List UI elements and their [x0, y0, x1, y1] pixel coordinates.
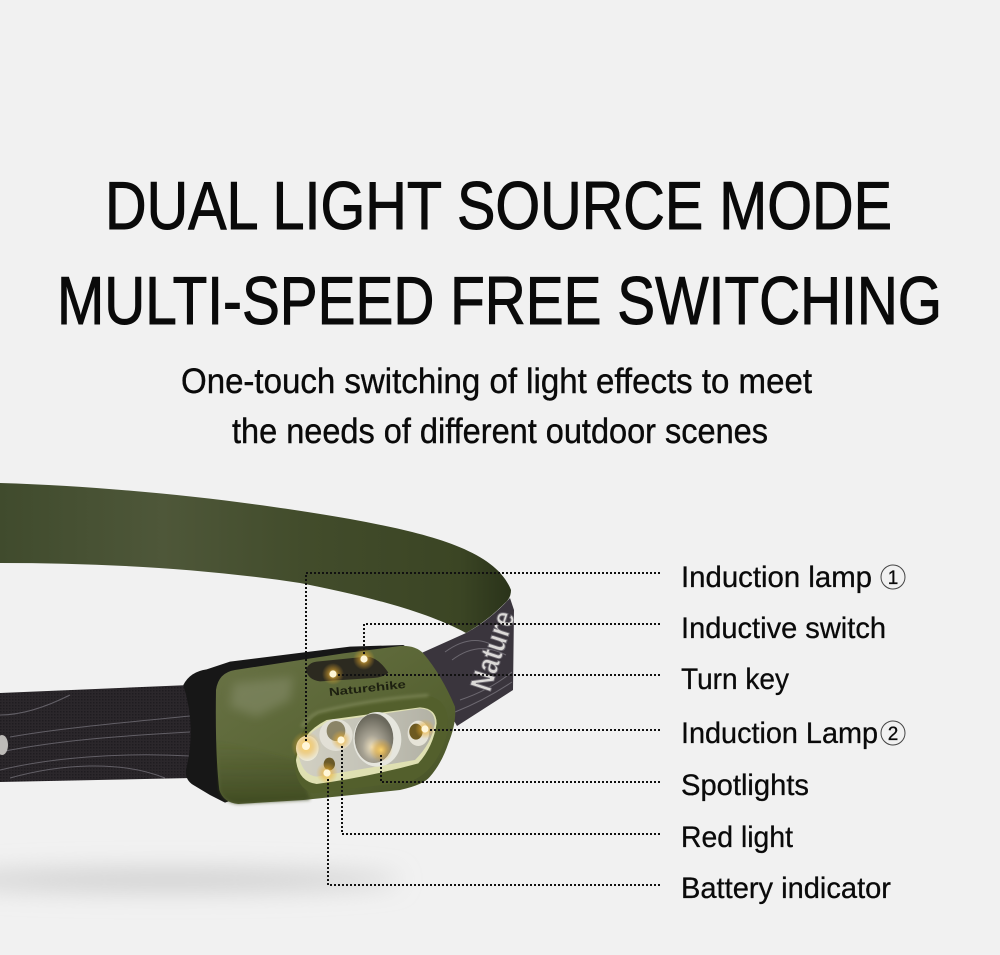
dark strap, left side	[0, 685, 192, 782]
label: induction lamp 1: Induction lamp	[681, 561, 872, 594]
right LED	[408, 721, 429, 746]
green shell	[216, 646, 455, 804]
subtitle	[181, 362, 812, 451]
front lens panel	[298, 708, 435, 777]
black rear bracket	[183, 645, 417, 803]
lamp housing (coordinates in 3x crop space)	[183, 645, 455, 804]
shell highlight	[230, 677, 293, 717]
subtitle: the needs of different outdoor scenes	[232, 412, 768, 451]
brand logo: Naturehike	[328, 679, 407, 699]
headlamp illustration	[0, 483, 522, 804]
label: induction lamp 2: 2	[888, 724, 898, 745]
dark strap, right side: Nature	[463, 606, 522, 695]
subtitle: One-touch switching of light effects to meet	[181, 362, 812, 401]
left LED	[296, 736, 319, 761]
dark strap, right side	[422, 598, 514, 726]
dotted leader lines	[306, 573, 660, 885]
red light	[319, 719, 353, 751]
battery indicator	[324, 758, 335, 770]
shell front recess	[294, 696, 448, 793]
green head strap	[0, 483, 511, 633]
front lens bezel	[296, 707, 437, 784]
recess top rim highlight	[302, 695, 428, 727]
label: induction lamp 2: Induction Lamp	[681, 717, 878, 750]
sensor window	[306, 657, 388, 681]
label: induction lamp 1: 1	[888, 568, 898, 589]
label: inductive switch: Inductive switch	[681, 612, 886, 645]
shell lower shading	[217, 740, 310, 804]
label: red light: Red light	[681, 821, 794, 854]
feature labels	[681, 561, 905, 905]
label: turn key: Turn key	[681, 663, 789, 696]
label: spotlights: Spotlights	[681, 769, 809, 802]
ground shadow	[0, 869, 400, 891]
label: battery indicator: Battery indicator	[681, 872, 891, 905]
spotlight lens	[353, 712, 401, 767]
glowing callout points	[291, 648, 435, 784]
title	[57, 168, 942, 339]
